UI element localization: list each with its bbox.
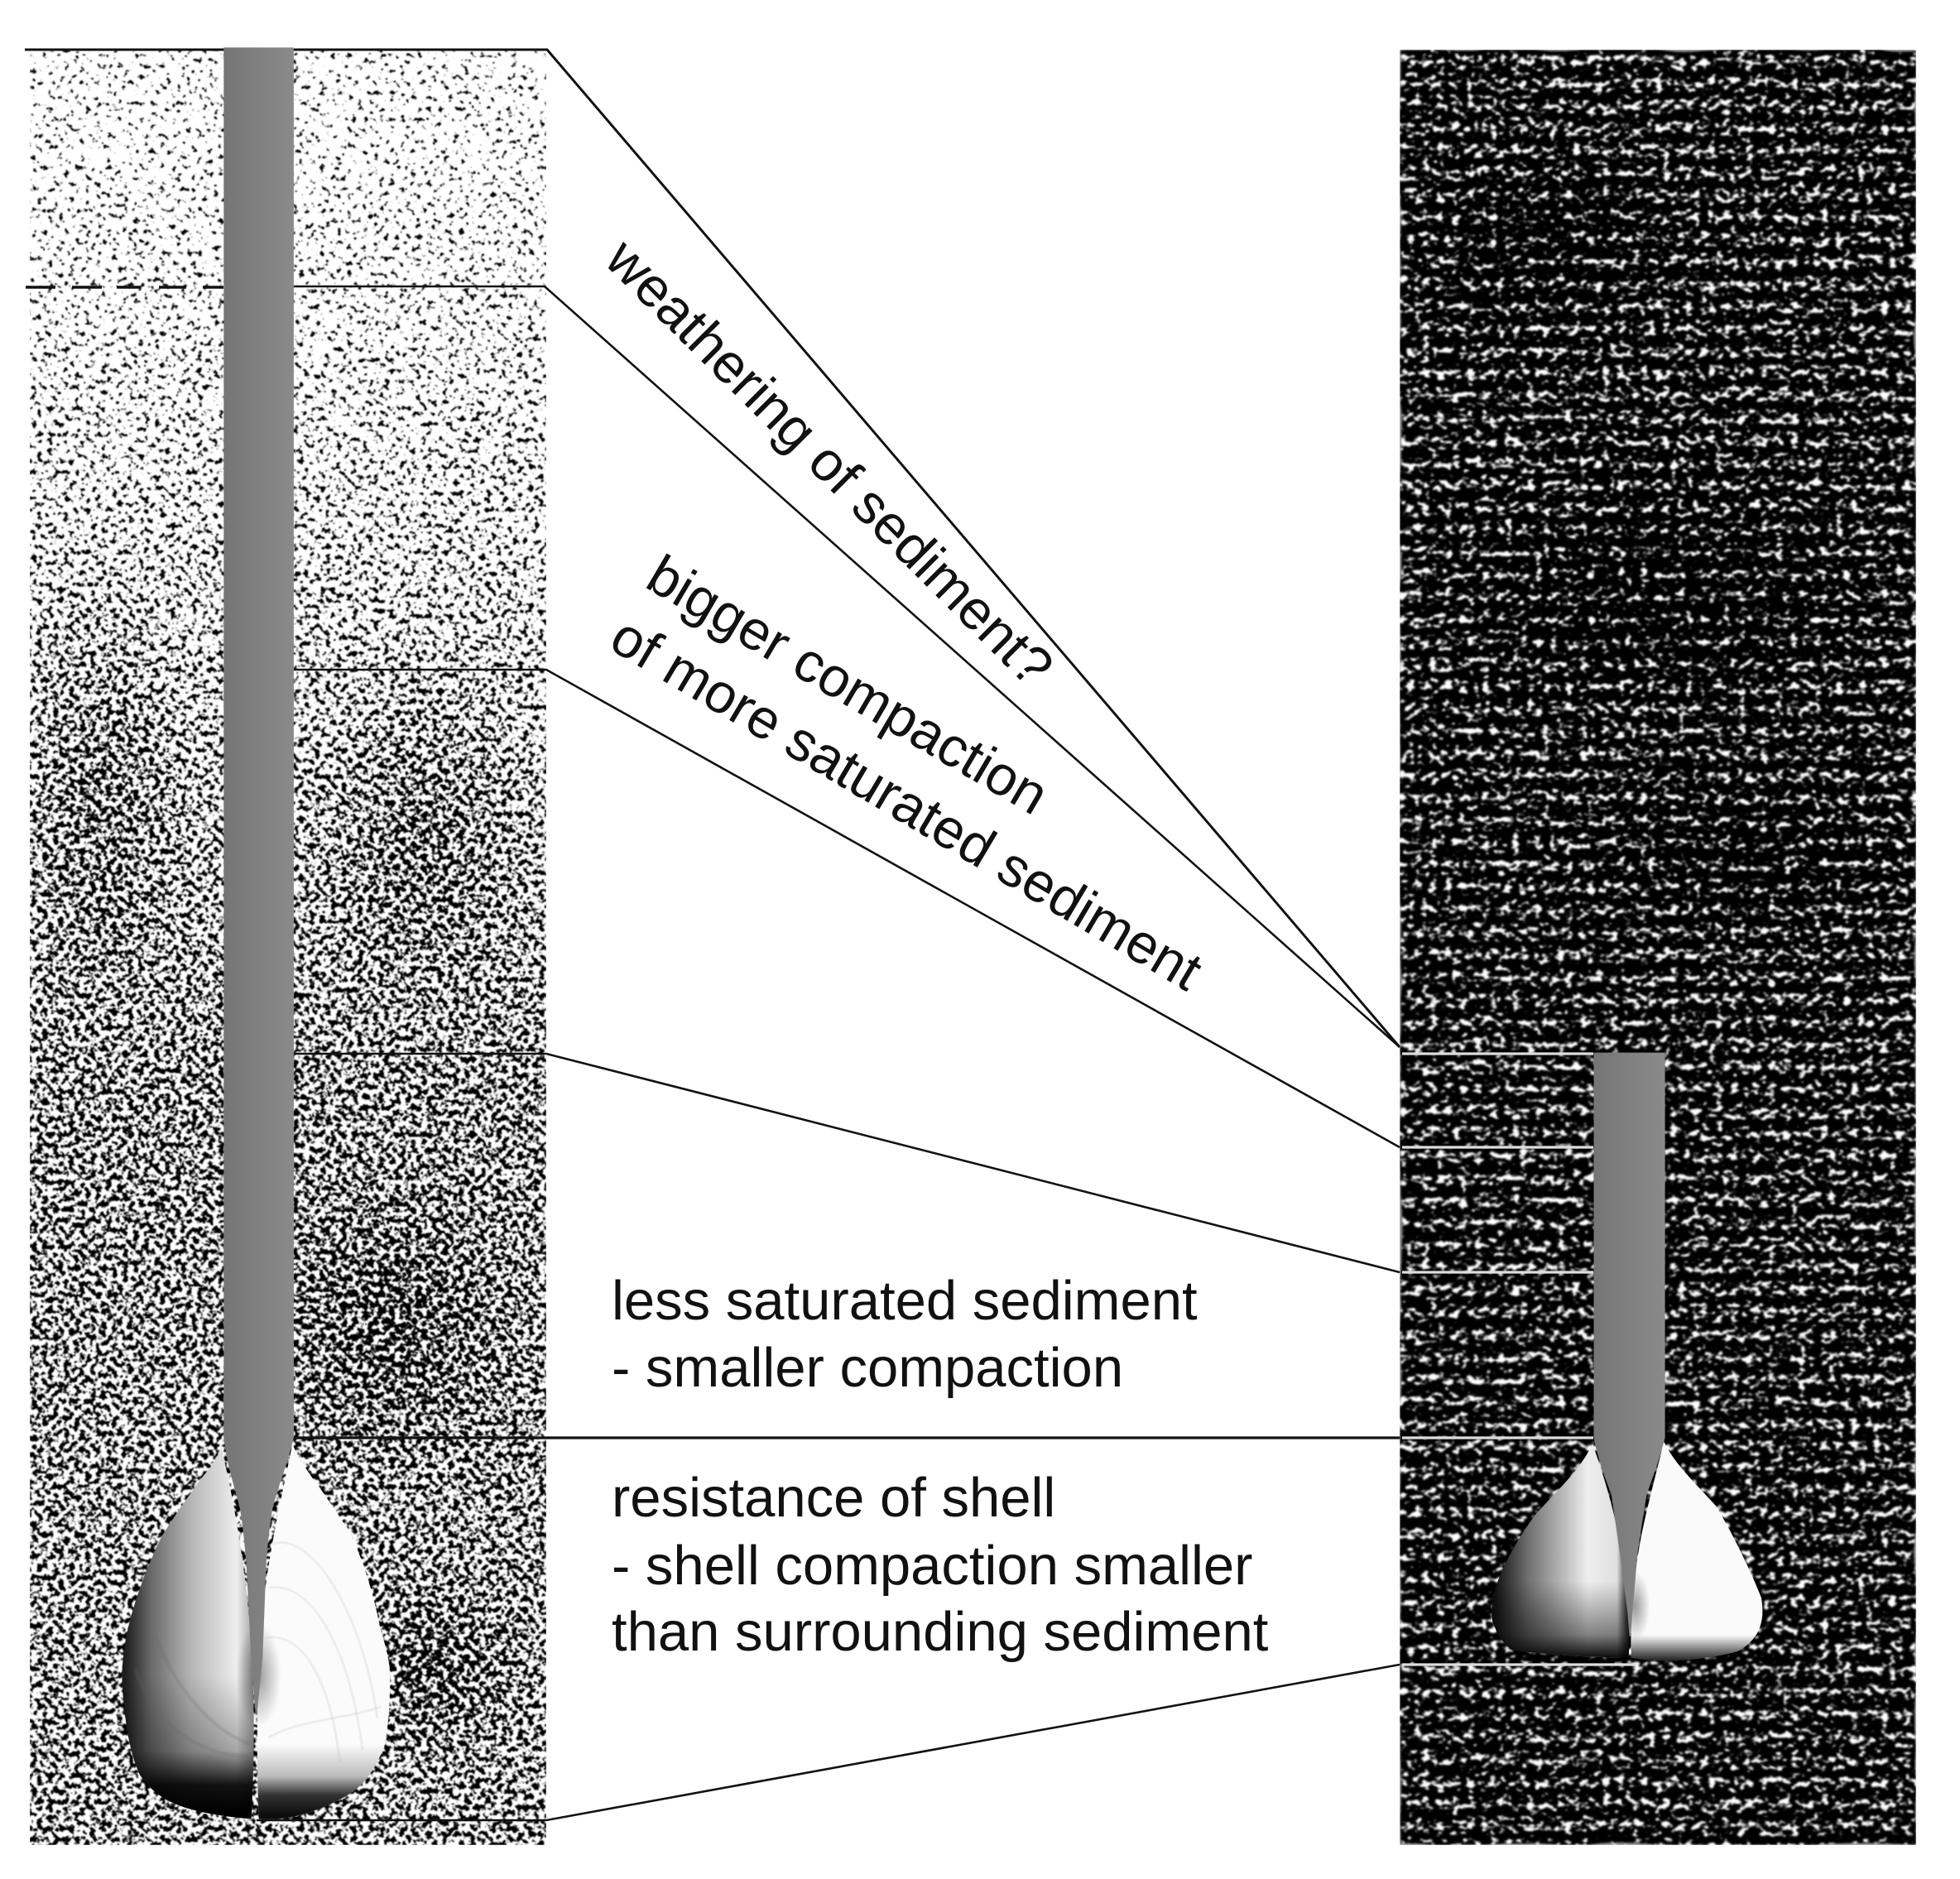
left shell: right valve [236,1444,390,1819]
label: resistance of shell: resistance of shell [612,1467,1055,1529]
right shell: left valve shading [1492,1444,1629,1658]
right burrow stem [1594,1053,1665,1636]
left burrow stem [223,47,294,1715]
white level lines on right panel [1402,1054,1636,1665]
label: resistance of shell [612,1467,1269,1663]
right shell: right valve [1631,1441,1762,1660]
panel: left sediment grain image [0,50,546,1845]
right shell: right valve shading [1620,1571,1757,1660]
label: less saturated sediment [612,1270,1198,1399]
label: resistance of shell: - shell compaction smaller [612,1535,1253,1597]
label: bigger compaction: of more saturated sediment [600,604,1213,1002]
label: less saturated sediment: less saturated sediment [612,1270,1198,1332]
panel: right compacted sediment image [1374,50,1937,1845]
left shell: left valve [122,1448,254,1819]
label: resistance of shell: than surrounding sediment [612,1601,1269,1663]
connector lines between sediment levels [25,50,1400,1820]
right shell: left valve [1492,1444,1629,1658]
label: less saturated sediment: - smaller compaction [612,1337,1123,1399]
label: bigger compaction: bigger compaction [637,543,1059,827]
label: weathering of sediment: weathering of sediment? [593,227,1065,699]
left shell and burrow stem [122,47,390,1819]
right shell and burrow stem [1492,1053,1762,1660]
